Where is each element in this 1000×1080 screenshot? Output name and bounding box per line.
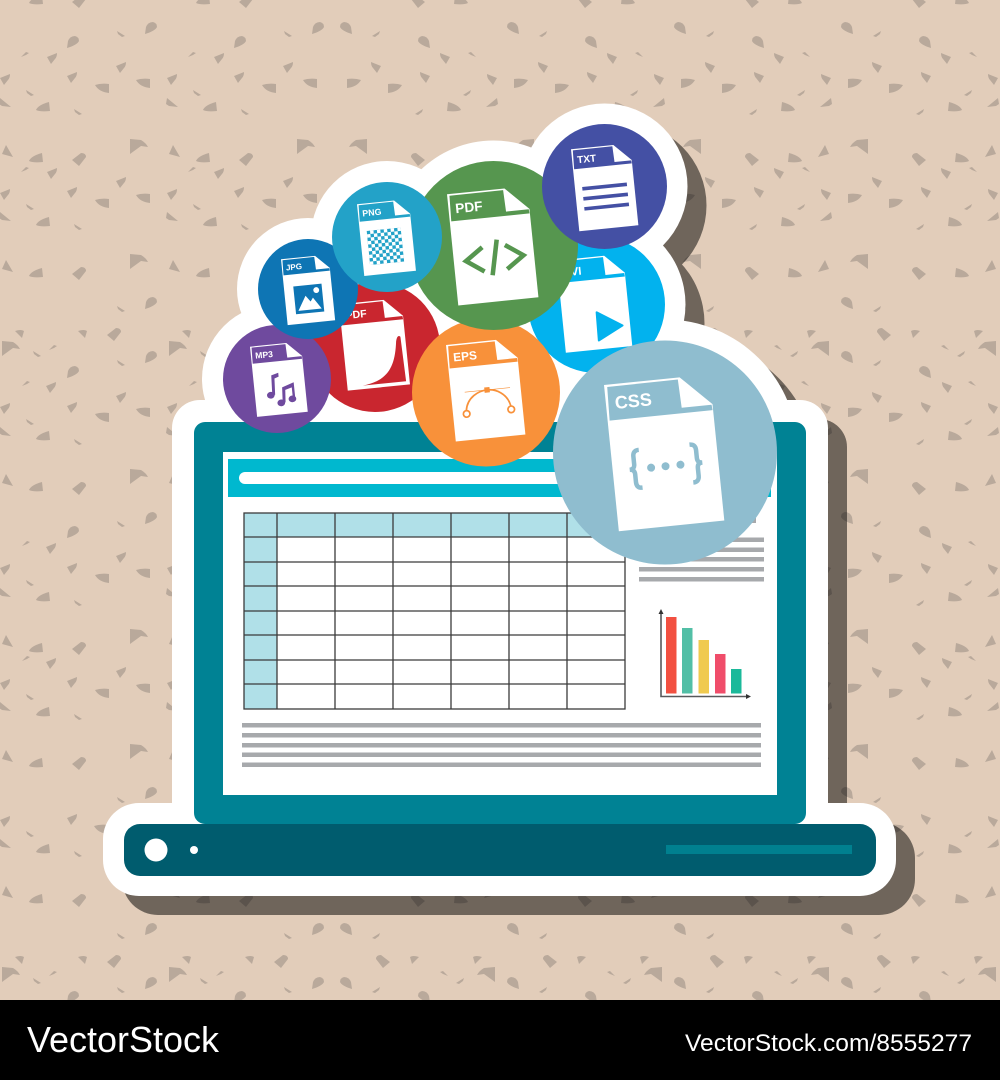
bubble: AVI [528,236,665,373]
bubble: PNG: PNG [362,207,382,219]
white sticker outline [103,104,896,896]
bubble: green PDF: PDF [455,199,483,216]
bubble: CSS [553,340,777,564]
bar chart [658,609,751,699]
bubble: EPS: EPS [453,348,478,364]
bubble: green PDF [409,161,578,330]
bubble: TXT [542,124,667,249]
bubble: TXT: TXT [577,153,598,166]
bubble: EPS [412,318,560,466]
spreadsheet window [223,452,777,795]
footer bar [0,1000,1000,1080]
bubble: red PDF: PDF [345,308,368,322]
bubble: red PDF [310,282,440,412]
laptop [124,422,876,876]
side text lines [639,518,764,582]
bubble: JPG: JPG [286,262,303,273]
laptop screen frame [194,422,806,824]
bubble: MP3: MP3 [255,349,274,361]
laptop base [124,824,876,876]
toolbar [228,459,771,497]
bottom text lines [242,723,761,767]
footer image id: VectorStock.com/8555277 [685,1030,972,1057]
bubble: JPG [258,239,358,339]
drop shadow [122,122,915,915]
footer brand: VectorStock [27,1019,220,1060]
bubble: PNG [332,182,442,292]
bubble: MP3 [223,325,331,433]
spreadsheet table [244,513,625,709]
bubble: CSS: CSS [614,389,653,413]
bubble: AVI: AVI [563,266,582,279]
